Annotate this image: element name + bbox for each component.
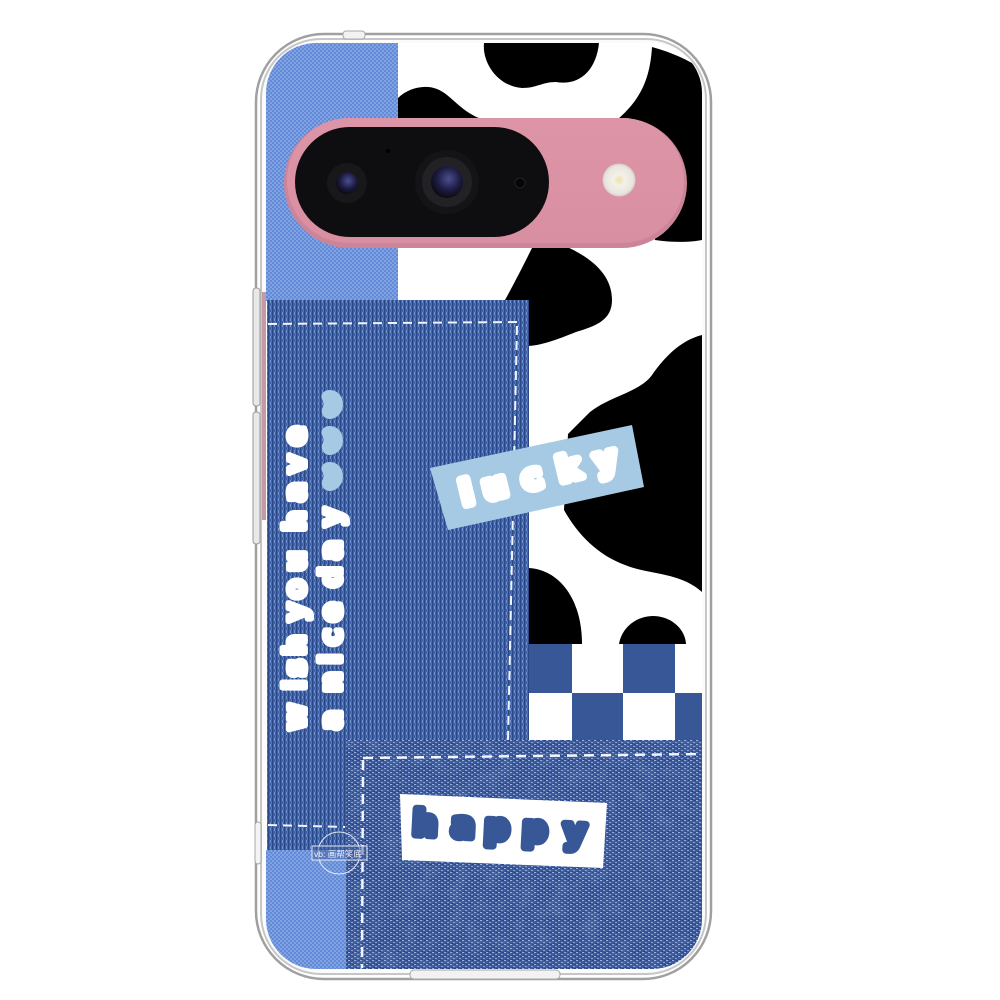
stitching on mid denim — [268, 322, 517, 827]
case bottom port — [410, 970, 560, 979]
pink bar shadow rim — [284, 118, 687, 248]
case inner rim — [261, 39, 706, 974]
left lens — [327, 163, 367, 203]
panel: light denim bottom left — [266, 850, 348, 970]
main lens — [415, 150, 479, 214]
flash — [602, 164, 636, 196]
camera bar — [284, 118, 687, 248]
cow spots — [398, 43, 702, 644]
pink phone edge — [262, 292, 266, 520]
phone case — [256, 34, 711, 979]
microphone — [515, 178, 525, 188]
upper button — [253, 288, 260, 406]
panel: dark denim pocket — [346, 740, 702, 970]
happy word: happy — [412, 803, 587, 852]
case top notch — [343, 31, 365, 39]
text: wish you have: wish you have — [278, 426, 312, 730]
stamp watermark — [312, 832, 367, 874]
checkerboard — [529, 644, 702, 740]
panel: mid denim — [267, 300, 529, 850]
sensor dot — [386, 149, 390, 153]
black lens island — [295, 127, 549, 237]
stitching on pocket — [362, 754, 702, 968]
white strip — [400, 794, 607, 868]
panel: white cow print background — [266, 43, 702, 969]
case outer rim — [256, 34, 711, 979]
stamp text: vb: 画帮笑底 — [314, 849, 362, 859]
panel: light denim top left — [266, 43, 398, 301]
label: lucky tape — [430, 425, 644, 530]
pink bar — [287, 118, 684, 243]
denim mottling on pocket — [346, 740, 702, 970]
lower button — [253, 412, 260, 544]
lucky word: lucky — [456, 438, 620, 513]
side buttons — [253, 288, 266, 864]
tape strip — [430, 425, 644, 530]
text: a nice day: a nice day — [314, 507, 348, 730]
stamp bar — [312, 846, 367, 860]
label: happy tape — [400, 794, 607, 868]
stamp circle — [318, 832, 360, 874]
back panel artwork — [266, 43, 702, 970]
icon: three blue hearts — [321, 390, 343, 491]
bottom side tab — [255, 822, 261, 864]
